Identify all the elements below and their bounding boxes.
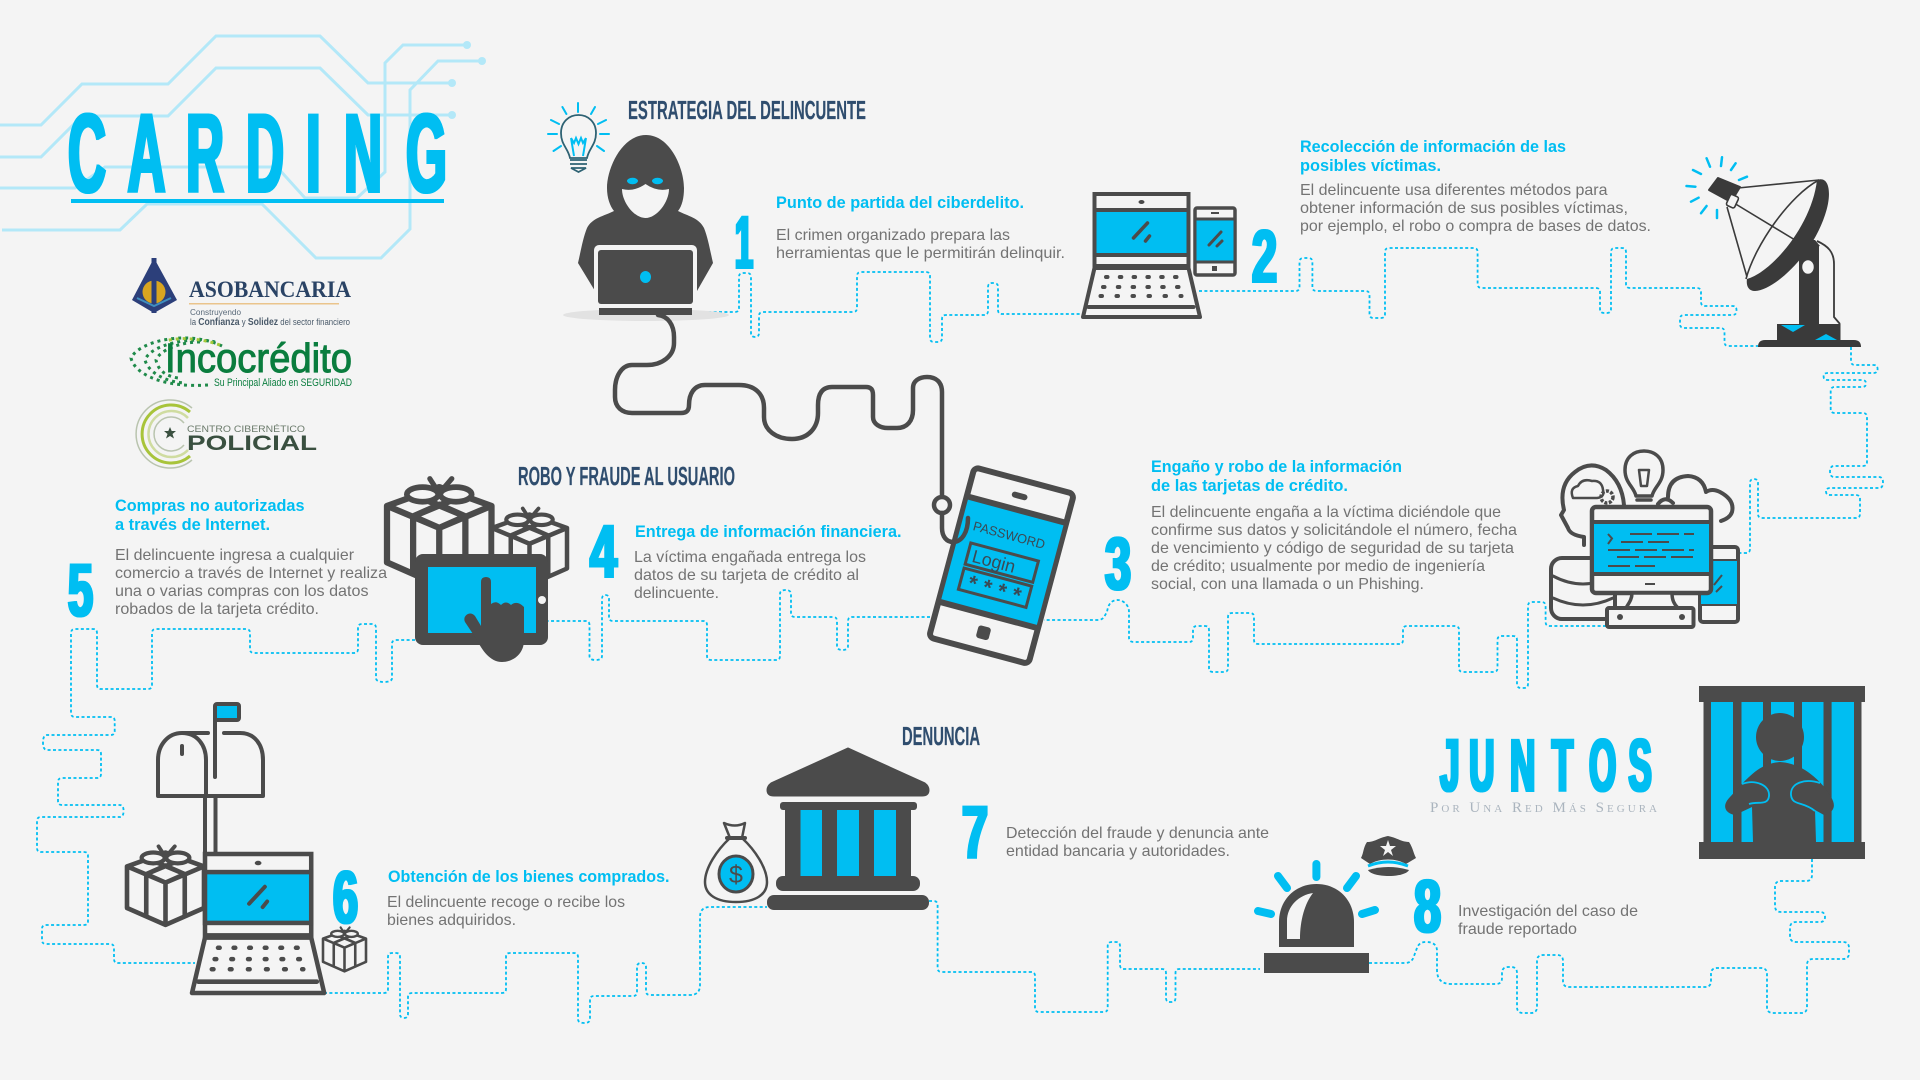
icon: laptop step 6 xyxy=(192,854,324,993)
dashed route: dish to computers xyxy=(1738,347,1883,553)
step 2 text: El delincuente usa diferentes métodos para xyxy=(1300,182,1608,199)
icon: phone with password login: Login xyxy=(970,546,1018,577)
dashed route: phone to tablet xyxy=(548,590,930,660)
icon: person in jail xyxy=(1699,686,1865,859)
step 2 text: obtener información de sus posibles víctimas, xyxy=(1300,200,1628,217)
step 3 text xyxy=(1151,457,1517,593)
icon: siren xyxy=(1258,864,1375,973)
icon: bank building xyxy=(767,748,929,910)
dashed route: laptop to bank xyxy=(324,907,767,1023)
icon: money bag xyxy=(705,823,767,902)
step 6 text xyxy=(387,867,670,929)
step 8 text xyxy=(1458,903,1638,938)
heading: estrategia del delincuente: ESTRATEGIA DEL DELINCUENTE xyxy=(628,97,866,125)
step 4 text: Entrega de información financiera. xyxy=(635,522,902,541)
icon: gift left of laptop xyxy=(127,846,204,925)
icon: light bulb xyxy=(548,103,609,172)
step 5 text: robados de la tarjeta crédito. xyxy=(115,601,319,618)
number 2: 2 xyxy=(1252,215,1277,298)
step 8 text: fraude reportado xyxy=(1458,921,1577,938)
step 4 text: datos de su tarjeta de crédito al xyxy=(634,567,859,584)
step 1 text: herramientas que le permitirán delinquir. xyxy=(776,245,1065,262)
dashed route: bank to siren xyxy=(929,901,1260,1012)
step 2 text xyxy=(1300,137,1651,235)
step 1 text xyxy=(776,193,1065,262)
step 4 text: delincuente. xyxy=(634,585,719,602)
step 2 text: Recolección de información de las xyxy=(1300,137,1566,156)
circuit lines decoration xyxy=(0,36,486,258)
logo: Asobancaria: ASOBANCARIA xyxy=(189,277,351,302)
step 3 text: de las tarjetas de crédito. xyxy=(1151,476,1348,495)
step 6 text: El delincuente recoge o recibe los xyxy=(387,894,625,911)
logo: Asobancaria: Construyendo xyxy=(190,308,242,317)
step 6 text: Obtención de los bienes comprados. xyxy=(388,867,670,886)
step 6 text: bienes adquiridos. xyxy=(387,912,516,929)
icon: USB-style cable with hook xyxy=(615,315,942,496)
step 5 text xyxy=(115,496,387,618)
number 8: 8 xyxy=(1414,865,1441,948)
slogan: juntos por una red más segura: Por Una Red Más Segura xyxy=(1430,800,1657,816)
icon: head, bulb, cloud, monitor, database xyxy=(1551,451,1738,627)
step 3 text: El delincuente engaña a la víctima diciéndole que xyxy=(1151,504,1501,521)
dashed route: computers to phone xyxy=(1044,600,1606,688)
dashed route: tablet to mailbox laptop xyxy=(37,624,415,963)
step 3 text: de vencimiento y código de seguridad de su tarjeta xyxy=(1151,540,1514,557)
icon: police cap xyxy=(1361,836,1416,876)
number 7: 7 xyxy=(962,791,988,874)
logo: Incocrédito: Su Principal Aliado en SEGURIDAD xyxy=(214,377,352,389)
icon: hooded hacker with laptop xyxy=(563,135,729,321)
logo: Asobancaria: la Confianza y Solidez del sector financiero xyxy=(190,317,350,328)
slogan: juntos por una red más segura: JUNTOS xyxy=(1440,726,1652,808)
logo: Centro Cibernético Policial: POLICIAL xyxy=(187,432,317,455)
dashed route: hacker to laptop xyxy=(692,272,1082,342)
title: CARDING: CARDING xyxy=(68,91,447,216)
dashed route: laptop to dish xyxy=(1199,248,1758,346)
text: 1 xyxy=(735,201,753,284)
logo: Centro Cibernético Policial xyxy=(136,400,317,468)
number 3: 3 xyxy=(1105,522,1131,605)
step 7 text: Detección del fraude y denuncia ante xyxy=(1006,825,1269,842)
step 5 text: una o varias compras con los datos xyxy=(115,583,368,600)
logo: Asobancaria xyxy=(132,258,351,328)
step 4 text: La víctima engañada entrega los xyxy=(634,549,866,566)
step 3 text: social, con una llamada o un Phishing. xyxy=(1151,576,1424,593)
step 7 text xyxy=(1006,825,1269,860)
step 3 text: Engaño y robo de la información xyxy=(1151,457,1402,476)
step 2 text: posibles víctimas. xyxy=(1300,156,1441,175)
icon: phone with password login xyxy=(929,467,1074,664)
icon: mailbox on post xyxy=(158,704,263,854)
number 6: 6 xyxy=(333,856,358,939)
step 4 text xyxy=(634,522,902,602)
icon: satellite dish xyxy=(1686,157,1861,347)
step 2 text: por ejemplo, el robo o compra de bases de datos. xyxy=(1300,218,1651,235)
step 3 text: de crédito; usualmente por medio de ingeniería xyxy=(1151,558,1485,575)
step 5 text: comercio a través de Internet y realiza xyxy=(115,565,387,582)
step 3 text: confirme sus datos y solicitándole el número, fecha xyxy=(1151,522,1517,539)
step 8 text: Investigación del caso de xyxy=(1458,903,1638,920)
icon: phone with password login: **** xyxy=(965,570,1024,608)
icon: laptop and small phone xyxy=(1083,194,1235,317)
logo: Incocrédito xyxy=(131,335,352,389)
heading: robo y fraude al usuario: ROBO Y FRAUDE AL USUARIO xyxy=(518,463,735,491)
logo: Incocrédito: Incocrédito xyxy=(165,335,352,381)
heading: denuncia: DENUNCIA xyxy=(902,723,980,751)
step 5 text: Compras no autorizadas xyxy=(115,496,304,515)
step 5 text: a través de Internet. xyxy=(115,515,270,534)
number 5: 5 xyxy=(68,549,93,632)
logo: Centro Cibernético Policial: CENTRO CIBERNÉTICO xyxy=(187,424,305,434)
icon: money bag: $ xyxy=(729,861,743,889)
step 1 text: El crimen organizado prepara las xyxy=(776,227,1010,244)
step 5 text: El delincuente ingresa a cualquier xyxy=(115,547,355,564)
dashed route: siren to jail xyxy=(1369,859,1849,1013)
step 1 text: Punto de partida del ciberdelito. xyxy=(776,193,1024,212)
icon: small gift xyxy=(323,927,366,971)
icon: phone with password login: PASSWORD xyxy=(971,518,1047,552)
hook ring xyxy=(934,497,968,542)
icon: gifts and tablet with hand xyxy=(387,479,567,662)
number 4: 4 xyxy=(590,510,617,593)
step 7 text: entidad bancaria y autoridades. xyxy=(1006,843,1230,860)
